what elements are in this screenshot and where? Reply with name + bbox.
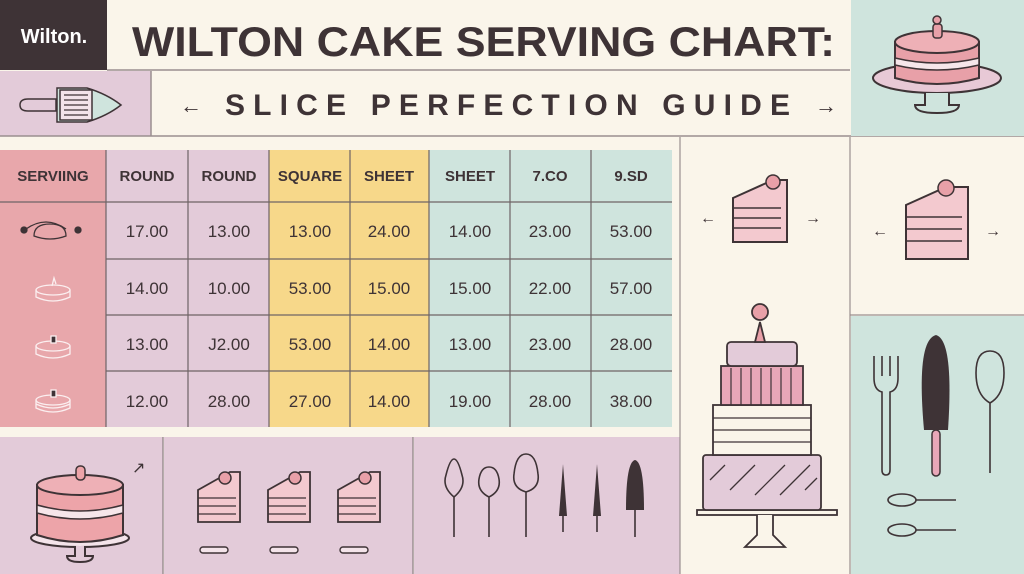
table header row: 9.SD: [614, 168, 648, 185]
panel: utensils: [851, 316, 1024, 574]
table values: 14.00: [368, 392, 410, 411]
table values: 12.00: [126, 392, 168, 411]
table values: 38.00: [610, 392, 652, 411]
panel: cake servers: [414, 437, 680, 574]
panel: slice right: ←: [872, 223, 888, 240]
table values: 14.00: [368, 335, 410, 354]
icon: four-tier cake: [697, 304, 837, 547]
title: WILTON CAKE SERVING CHART:: [132, 18, 835, 65]
table values: 10.00: [208, 279, 250, 298]
table: serving chart: [0, 150, 672, 427]
table values: 13.00: [449, 335, 491, 354]
icon: slice with arrows: →: [805, 210, 821, 227]
table values: 22.00: [529, 279, 571, 298]
table header row: SERVIING: [17, 168, 89, 185]
table values: 13.00: [126, 335, 168, 354]
subtitle: SLICE PERFECTION GUIDE: [225, 89, 790, 122]
subtitle: →: [815, 93, 837, 118]
table values: 13.00: [208, 222, 250, 241]
table values: 53.00: [289, 335, 331, 354]
table values: 27.00: [289, 392, 331, 411]
panel: cake on stand (top right): [851, 0, 1024, 136]
table values: 17.00: [126, 222, 168, 241]
table header row: SHEET: [364, 168, 414, 185]
panel: three slices: [164, 437, 413, 574]
table values: 53.00: [289, 279, 331, 298]
icon: slice with arrows: ←: [700, 210, 716, 227]
table header row: SHEET: [445, 168, 495, 185]
table values: 57.00: [610, 279, 652, 298]
logo: Wilton: [0, 0, 107, 70]
table header row: ROUND: [202, 168, 257, 185]
panel: cake server icon: [0, 71, 151, 136]
table values: 28.00: [208, 392, 250, 411]
table values: J2.00: [208, 335, 250, 354]
table header row: [17, 168, 648, 185]
table values: 14.00: [449, 222, 491, 241]
table values: 23.00: [529, 335, 571, 354]
panel: bottom left cake: [0, 437, 163, 574]
table values: [126, 222, 652, 411]
table values: 15.00: [368, 279, 410, 298]
subtitle: ←: [180, 93, 202, 118]
table values: 14.00: [126, 279, 168, 298]
panel: tiered cake: [680, 137, 850, 574]
row icons: [21, 222, 81, 412]
logo: Wilton: Wilton.: [21, 26, 87, 48]
table values: 28.00: [529, 392, 571, 411]
table header row: 7.CO: [532, 168, 568, 185]
table values: 15.00: [449, 279, 491, 298]
panel: slice right: [851, 137, 1024, 315]
table values: 53.00: [610, 222, 652, 241]
panel: bottom left cake: ↗: [132, 460, 145, 477]
table values: 23.00: [529, 222, 571, 241]
table values: 19.00: [449, 392, 491, 411]
table values: 28.00: [610, 335, 652, 354]
table values: 24.00: [368, 222, 410, 241]
table values: 13.00: [289, 222, 331, 241]
table header row: ROUND: [120, 168, 175, 185]
panel: slice right: →: [985, 223, 1001, 240]
table header row: SQUARE: [278, 168, 342, 185]
icon: slice with arrows: [700, 175, 821, 242]
